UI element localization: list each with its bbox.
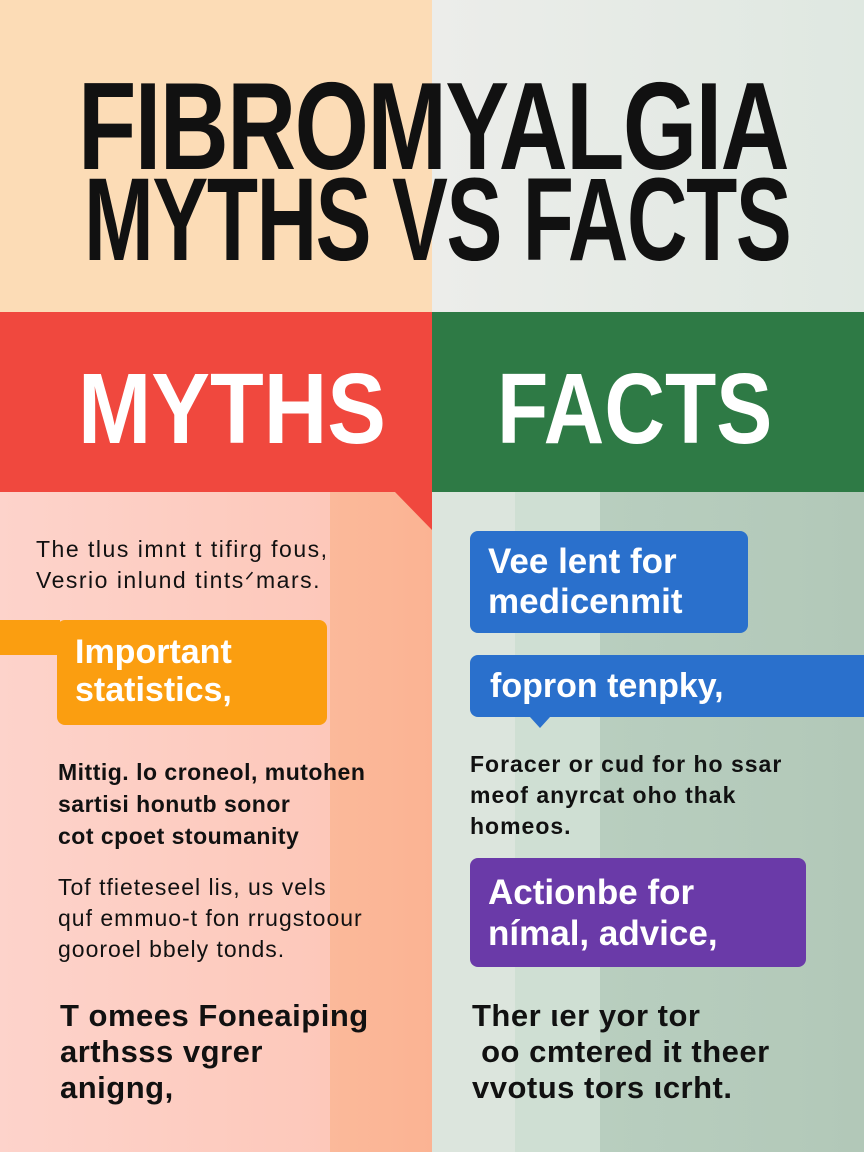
fact text 2: oo cmtered it theer bbox=[481, 1034, 770, 1069]
blue callout 1: medicenmit bbox=[488, 582, 682, 621]
fact text 1 bbox=[470, 751, 782, 839]
background: lower right bbox=[432, 492, 864, 1152]
myth text 3: Tof tfieteseel lis, us vels bbox=[58, 874, 327, 900]
fact text 2 bbox=[472, 998, 770, 1105]
orange callout: important statistics: statistics, bbox=[75, 671, 232, 709]
title bbox=[78, 58, 790, 286]
header: myths: MYTHS bbox=[78, 353, 386, 465]
purple callout: nímal, advice, bbox=[488, 914, 718, 953]
title: MYTHS VS FACTS bbox=[84, 154, 790, 286]
myth text 1 bbox=[36, 536, 329, 593]
fact text 1: Foracer or cud for ho ssar bbox=[470, 751, 782, 777]
blue callout 2: fopron tenpky, bbox=[490, 667, 724, 705]
myth text 1: Vesrio inlund tintsᐟmars. bbox=[36, 567, 321, 593]
callout tail bbox=[530, 717, 550, 728]
speech tail: myths bbox=[395, 492, 432, 530]
myth text 4: anigng, bbox=[60, 1070, 174, 1105]
blue callout 1: Vee lent for bbox=[488, 542, 677, 581]
myth text 3 bbox=[58, 874, 363, 962]
fact text 2: Ther ιer yor tor bbox=[472, 998, 700, 1033]
myth text 1: The tlus imnt t tifirg fous, bbox=[36, 536, 329, 562]
myth text 4: T omees Foneaiping bbox=[60, 998, 369, 1033]
orange callout: important statistics bbox=[57, 620, 327, 725]
header: myths bbox=[0, 312, 432, 492]
myth text 2: cot cpoet stoumanity bbox=[58, 823, 299, 849]
myth text 2 bbox=[58, 759, 365, 849]
myth text 4 bbox=[60, 998, 369, 1105]
background: top right bbox=[432, 0, 864, 312]
fact text 1: homeos. bbox=[470, 813, 572, 839]
blue callout 2 bbox=[470, 655, 864, 717]
background: top left bbox=[0, 0, 432, 312]
myth text 2: Mittig. lo croneol, mutohen bbox=[58, 759, 365, 785]
myth text 3: quf emmuo-t fon rrugstoour bbox=[58, 905, 363, 931]
fact text 2: vvotus tors ιcrht. bbox=[472, 1070, 732, 1105]
blue callout 1 bbox=[470, 531, 748, 633]
background: lower left bbox=[0, 492, 432, 1152]
purple callout: Actionbe for bbox=[488, 873, 694, 912]
myth text 3: gooroel bbely tonds. bbox=[58, 936, 285, 962]
myth text 2: sartisi honutb sonor bbox=[58, 791, 290, 817]
header: facts bbox=[432, 312, 864, 492]
callout tab bbox=[0, 620, 60, 655]
header: facts: FACTS bbox=[497, 353, 772, 465]
fact text 1: meof anyrcat oho thak bbox=[470, 782, 736, 808]
title: FIBROMYALGIA bbox=[78, 58, 788, 196]
orange callout: important statistics: Important bbox=[75, 633, 232, 671]
myth text 4: arthsss vgrer bbox=[60, 1034, 263, 1069]
purple callout bbox=[470, 858, 806, 967]
